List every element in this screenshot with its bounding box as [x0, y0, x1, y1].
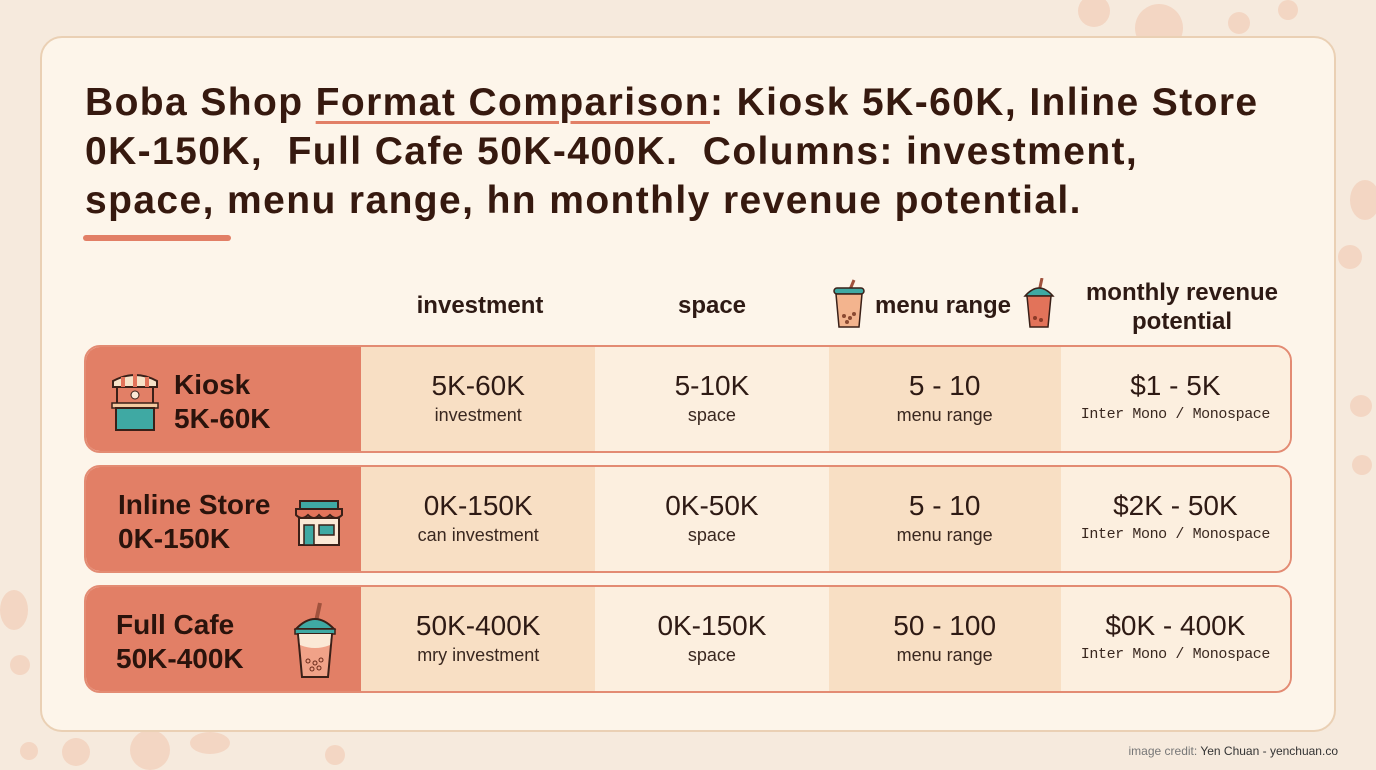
cell: menu range: menu range — [897, 405, 993, 425]
label text: 50K-400K — [116, 643, 244, 674]
label text: 0K-150K — [118, 523, 230, 554]
header: monthly revenue potential: monthly revenue potential — [1086, 279, 1278, 335]
cell: revenue: Inter Mono / Monospace — [1081, 406, 1270, 423]
cell: space — [595, 587, 829, 691]
header: menu range — [833, 278, 1055, 328]
cell: space: 0K-50K — [665, 490, 759, 521]
cell: investment: 0K-150K — [424, 490, 533, 521]
title: space, menu range, hn monthly revenue potential. — [85, 179, 1082, 222]
cell: revenue — [1061, 587, 1290, 691]
cell: revenue: $2K - 50K — [1113, 490, 1238, 521]
cell: revenue: $1 - 5K — [1130, 370, 1221, 401]
cell: space — [595, 347, 829, 451]
label text — [174, 369, 270, 434]
cell: menu range — [829, 347, 1061, 451]
cell: investment: investment — [435, 405, 522, 425]
cell: menu range: menu range — [897, 525, 993, 545]
cell: menu range: 5 - 10 — [909, 490, 980, 521]
cell: investment — [361, 587, 595, 691]
row: Kiosk — [84, 345, 1292, 453]
row: Full Cafe — [84, 585, 1292, 693]
title — [85, 81, 1258, 222]
label text: 5K-60K — [174, 403, 270, 434]
header: space: space — [678, 292, 746, 319]
header: investment: investment — [417, 292, 543, 319]
cell: investment: 50K-400K — [416, 610, 540, 641]
cell: menu range: 50 - 100 — [893, 610, 996, 641]
cell: revenue: Inter Mono / Monospace — [1081, 646, 1270, 663]
cell: revenue: $0K - 400K — [1105, 610, 1245, 641]
icon: storefront — [295, 500, 343, 546]
row label: Kiosk — [86, 347, 361, 451]
icon: kiosk — [111, 374, 159, 431]
cell: revenue — [1061, 467, 1290, 571]
row label: Full Cafe — [86, 587, 361, 691]
label text — [118, 489, 270, 554]
cell: space — [595, 467, 829, 571]
row: Inline Store — [84, 465, 1292, 573]
title: 0K-150K, Full Cafe 50K-400K. Columns: investment, — [85, 130, 1138, 173]
row label: Inline Store — [86, 467, 361, 571]
cell: revenue — [1061, 347, 1290, 451]
icon: boba cup left — [833, 279, 865, 328]
cell: menu range — [829, 587, 1061, 691]
cell: investment — [361, 467, 595, 571]
cell: investment: mry investment — [417, 645, 539, 665]
icon: boba cup — [294, 602, 336, 678]
cell: space: space — [688, 525, 736, 545]
cell: investment — [361, 347, 595, 451]
cell: menu range: menu range — [897, 645, 993, 665]
cell: space: space — [688, 645, 736, 665]
credit: image credit: Yen Chuan - yenchuan.co — [1129, 744, 1338, 758]
label: menu range — [875, 292, 1011, 319]
cell: revenue: Inter Mono / Monospace — [1081, 526, 1270, 543]
cell: investment: can investment — [418, 525, 539, 545]
label text — [116, 609, 244, 674]
cell: menu range: 5 - 10 — [909, 370, 980, 401]
cell: space: 0K-150K — [657, 610, 766, 641]
label text: Inline Store — [118, 489, 270, 520]
accent bar — [83, 235, 231, 241]
cell: investment: 5K-60K — [432, 370, 525, 401]
label text: Full Cafe — [116, 609, 234, 640]
icon: boba cup right — [1023, 278, 1055, 328]
cell: menu range — [829, 467, 1061, 571]
label text: Kiosk — [174, 369, 250, 400]
cell: space: 5-10K — [675, 370, 749, 401]
title: Boba Shop Format Comparison: Kiosk 5K-60K, Inline Store — [85, 81, 1258, 124]
cell: space: space — [688, 405, 736, 425]
